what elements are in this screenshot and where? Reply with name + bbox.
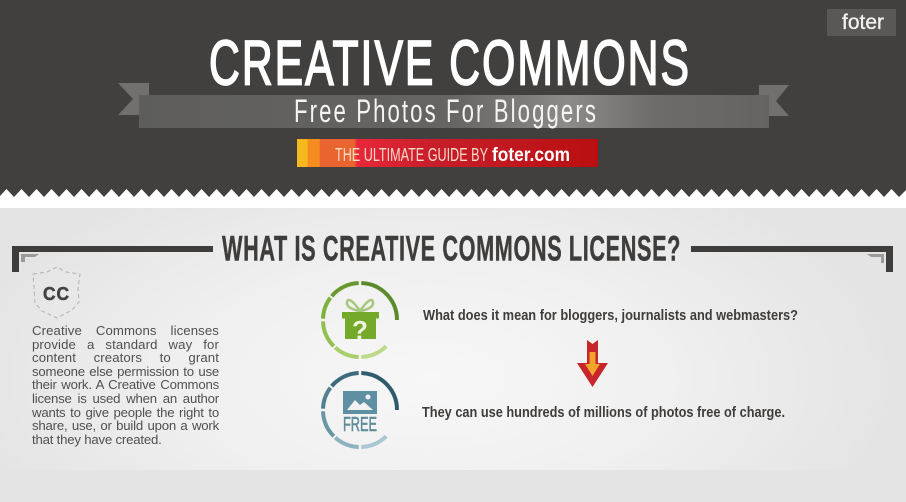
subtitle: Free Photos For Bloggers <box>294 93 598 129</box>
description text block: wants to give people the right to <box>32 405 219 420</box>
description text block: that they have created. <box>32 432 162 447</box>
icon: free photo ring <box>323 373 397 447</box>
header background <box>0 0 906 208</box>
description text block: someone else permission to use <box>32 364 219 379</box>
icon: gift ring <box>323 283 397 357</box>
icon: down arrow <box>577 340 608 387</box>
ribbon banner <box>118 83 789 129</box>
description text block: provide a standard way for <box>32 337 219 352</box>
description text block: Creative Commons licenses <box>32 323 219 338</box>
description text block: content creators to grant <box>32 350 219 365</box>
question text: What does it mean for bloggers, journalists and webmasters? <box>423 307 798 324</box>
icon: cc shield: CC <box>43 284 70 304</box>
icon: gift ring: ? <box>352 315 368 345</box>
right heading bracket <box>691 246 893 272</box>
guide label bar: foter.com <box>492 145 570 166</box>
answer text: They can use hundreds of millions of photos free of charge. <box>422 404 785 421</box>
description text block: license is used when an author <box>32 391 219 406</box>
left heading bracket <box>12 246 213 272</box>
guide label bar: THE ULTIMATE GUIDE BY <box>335 145 488 165</box>
description text block <box>32 323 220 447</box>
icon: cc shield <box>33 267 80 318</box>
description text block: their work. A Creative Commons <box>32 377 219 392</box>
guide label bar <box>297 139 598 167</box>
foter logo tag: foter <box>842 11 884 34</box>
foter logo tag <box>827 9 896 36</box>
description text block: share, use, or build upon a work <box>32 418 219 433</box>
title: CREATIVE COMMONS <box>209 28 691 98</box>
icon: free photo ring: FREE <box>343 414 377 436</box>
